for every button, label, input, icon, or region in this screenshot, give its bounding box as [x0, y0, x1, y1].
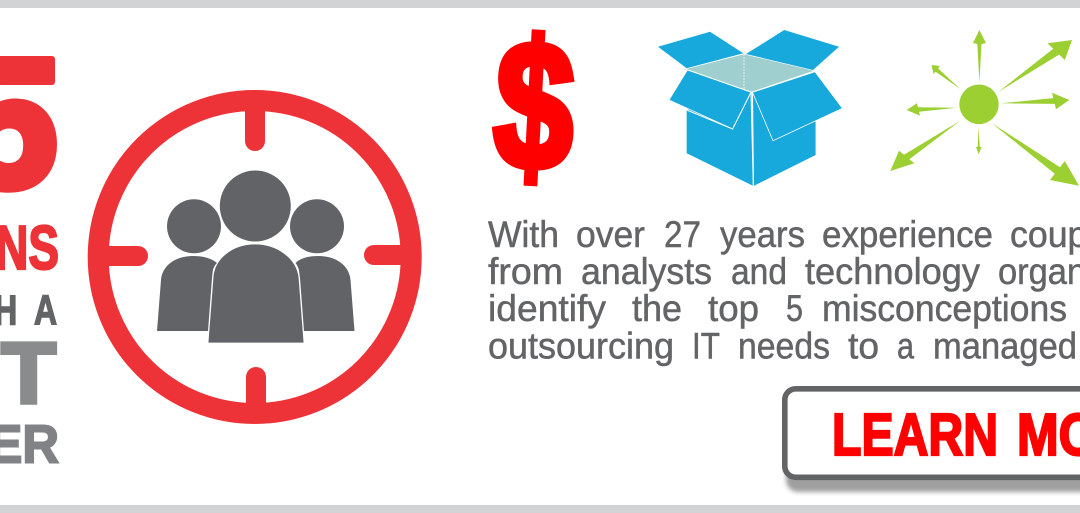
text block: description: technology [805, 251, 980, 292]
icon: green hub with arrows [890, 30, 1079, 186]
text block: description: to [848, 326, 879, 366]
text block: description: outsourcing [488, 326, 674, 366]
target ring [98, 100, 411, 414]
text block: description: a [897, 326, 914, 366]
text block: description: With [488, 214, 559, 255]
text block: description: IT [692, 326, 720, 366]
text block: description: the [632, 288, 682, 329]
button: learn more: LEARN [832, 402, 998, 468]
text block: description: years [720, 214, 805, 255]
title: clipped headline [0, 23, 59, 475]
target crosshair ticks [105, 105, 405, 410]
text block: description: misconceptions [822, 288, 1067, 329]
text block: description: over [576, 214, 645, 255]
text block: description: 5 [786, 288, 803, 329]
people group [157, 170, 354, 343]
button: learn more [785, 389, 1080, 492]
text block: description: top [708, 288, 759, 329]
text block: description: needs [738, 326, 830, 366]
icon: target with group of people [98, 100, 411, 414]
icon: open blue box [658, 30, 842, 186]
icon: dollar sign: $ [490, 2, 579, 210]
text block: description: analysts [581, 251, 712, 292]
text block: description: experience [822, 214, 993, 255]
text block: description [488, 214, 1080, 366]
text block: description: from [488, 251, 563, 292]
text block: description: and [731, 251, 787, 292]
text block: description: 27 [664, 214, 701, 255]
text block: description: identify [488, 288, 607, 329]
